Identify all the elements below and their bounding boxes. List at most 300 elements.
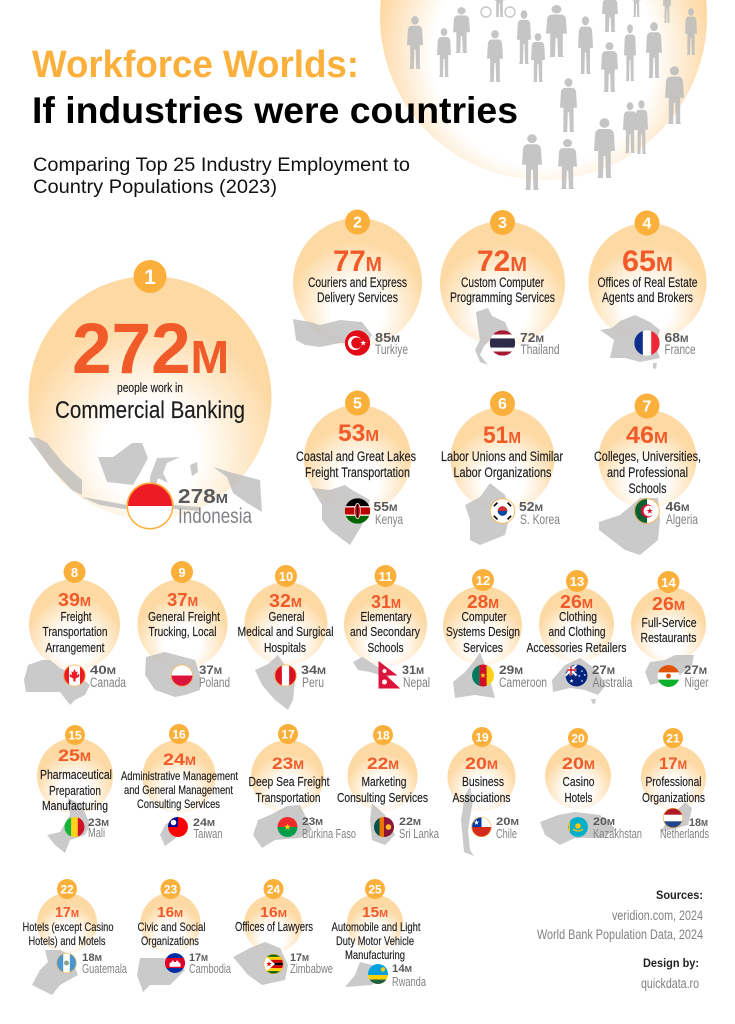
label: Schools xyxy=(368,640,404,655)
card 3: Custom Computer Programming / Thailand xyxy=(440,210,565,365)
bubble xyxy=(348,741,418,811)
flag: Burkina Faso xyxy=(278,817,298,837)
flag: Nepal xyxy=(379,662,399,688)
card 7: Colleges / Algeria xyxy=(594,394,701,555)
label: Professional xyxy=(646,774,702,789)
bubble xyxy=(138,579,228,669)
card 6: Labor Unions / S. Korea xyxy=(441,391,563,545)
rank badge: 16 xyxy=(172,728,186,742)
map: Niger xyxy=(645,655,694,685)
title: If industries were countries xyxy=(32,90,518,131)
title: Workforce Worlds: xyxy=(32,44,359,86)
card 21: Professional Organizations / Netherlands xyxy=(641,728,709,841)
card 13: Clothing Retailers / Australia xyxy=(526,570,633,704)
population xyxy=(499,663,547,690)
flag: S. Korea xyxy=(490,498,515,524)
value: 16M xyxy=(260,905,287,921)
label: Consulting Services xyxy=(337,790,428,805)
bubble xyxy=(293,218,422,347)
label: and General Management xyxy=(124,783,234,797)
bubble xyxy=(244,582,328,665)
population: Kazakhstan xyxy=(593,827,642,841)
card 24: Offices of Lawyers / Zimbabwe xyxy=(233,879,333,985)
label xyxy=(40,767,112,813)
card 4: Real Estate / France xyxy=(588,210,706,369)
population xyxy=(199,663,230,690)
bubble xyxy=(631,587,706,662)
flag: Thailand xyxy=(490,330,515,356)
label: Labor Organizations xyxy=(454,465,552,480)
population xyxy=(592,663,633,690)
value: 15M xyxy=(362,905,388,921)
rank badge: 18 xyxy=(376,728,390,742)
label: Administrative Management xyxy=(121,769,239,783)
label xyxy=(121,769,239,811)
value: 37M xyxy=(167,589,198,610)
flag: Cameroon xyxy=(472,664,494,686)
population: 24M xyxy=(193,817,215,829)
label: Coastal and Great Lakes xyxy=(296,449,416,464)
label: Offices of Real Estate xyxy=(598,275,698,290)
rank badge xyxy=(345,210,370,234)
map: Kazakhstan xyxy=(540,812,617,845)
population xyxy=(178,486,252,528)
rank badge: 3 xyxy=(498,215,507,232)
title xyxy=(32,44,518,131)
population xyxy=(374,499,403,527)
population xyxy=(402,663,430,690)
population: Nepal xyxy=(403,675,430,690)
label xyxy=(296,449,416,480)
label: Organizations xyxy=(642,790,705,805)
map: Peru xyxy=(255,655,295,710)
rank badge xyxy=(634,210,660,236)
flag: Poland xyxy=(171,664,193,686)
value: 22M xyxy=(367,754,399,773)
label: Commercial Banking xyxy=(55,397,245,424)
population: 72M xyxy=(520,330,544,345)
label: Custom Computer xyxy=(461,275,544,290)
label: people work in xyxy=(117,380,183,395)
rank badge: 22 xyxy=(60,882,74,896)
flag: Mali xyxy=(64,817,84,837)
label: Deep Sea Freight xyxy=(248,774,330,789)
rank badge: 10 xyxy=(279,569,293,584)
map: Cambodia xyxy=(137,958,185,992)
population: Zimbabwe xyxy=(290,962,333,976)
flag: Chile xyxy=(472,817,492,837)
population: Algeria xyxy=(666,511,698,527)
rank badge: 8 xyxy=(71,565,78,580)
rank badge: 4 xyxy=(643,216,652,232)
population: S. Korea xyxy=(520,511,560,527)
population xyxy=(189,952,231,976)
population: 34 M xyxy=(301,663,326,677)
label: and Clothing xyxy=(548,624,606,639)
population: 29M xyxy=(499,663,523,677)
rank badge: 24 xyxy=(267,882,280,896)
label: Organizations xyxy=(141,934,199,948)
population xyxy=(290,952,333,976)
population: France xyxy=(664,341,696,357)
bubble xyxy=(641,745,706,810)
bubble xyxy=(545,743,611,809)
sources: veridion.com, 2024 xyxy=(612,908,703,923)
label xyxy=(640,615,697,645)
population: 278 M xyxy=(178,486,228,508)
value: 20 M xyxy=(562,754,595,773)
bubble xyxy=(140,893,200,953)
rank badge: 11 xyxy=(379,569,392,584)
bubble xyxy=(539,587,614,662)
value: 26M xyxy=(652,593,685,614)
label: Business xyxy=(462,774,504,789)
population: 17M xyxy=(189,952,208,964)
label: Hospitals xyxy=(264,640,306,655)
value: 25 M xyxy=(58,746,91,765)
rank badge xyxy=(345,390,370,416)
rank badge: 14 xyxy=(661,575,676,590)
card 19: Business Associations / Chile xyxy=(448,727,519,856)
value: 46M xyxy=(626,422,668,449)
bubble xyxy=(29,579,120,670)
value: 77M xyxy=(333,245,382,278)
flag: Taiwan xyxy=(168,817,188,837)
value: 53M xyxy=(338,420,379,447)
population: Cameroon xyxy=(499,675,547,690)
label: Preparation xyxy=(49,783,101,798)
map: Nepal xyxy=(353,657,390,678)
label: Freight xyxy=(60,609,92,624)
value: 72M xyxy=(477,245,527,278)
card 14: Full-Service Restaurants / Niger xyxy=(631,571,709,690)
map: Zimbabwe xyxy=(233,942,288,985)
map: Netherlands xyxy=(660,802,692,832)
subtitle: Country Populations (2023) xyxy=(33,177,277,198)
label: Labor Unions and Similar xyxy=(441,449,563,464)
label: Clothing xyxy=(559,609,597,624)
label xyxy=(55,380,245,424)
label: General Freight xyxy=(148,609,220,624)
population: Peru xyxy=(302,675,324,690)
label xyxy=(350,609,420,655)
rank badge: 19 xyxy=(475,730,489,744)
label xyxy=(594,449,701,496)
card 10: Hospitals / Peru xyxy=(238,565,334,710)
card 1: Commercial Banking / Indonesia xyxy=(28,260,272,530)
bubble xyxy=(588,223,706,341)
flag: Sri Lanka xyxy=(374,817,394,837)
label xyxy=(238,609,334,655)
population: Sri Lanka xyxy=(399,827,439,841)
flag: Netherlands xyxy=(663,808,683,828)
population: Cambodia xyxy=(189,962,231,976)
population xyxy=(593,816,642,841)
population xyxy=(88,817,109,840)
rank badge: 12 xyxy=(476,573,490,588)
population: 27M xyxy=(684,663,707,677)
label xyxy=(337,774,428,805)
population: 37M xyxy=(199,663,222,677)
map: Chile xyxy=(461,787,474,856)
label: Programming Services xyxy=(450,290,555,305)
map: Poland xyxy=(145,652,200,697)
rank badge xyxy=(134,260,166,293)
flag: Australia xyxy=(566,664,588,686)
value: 31M xyxy=(371,591,401,612)
population: Mali xyxy=(88,826,105,840)
population: Guatemala xyxy=(82,962,127,976)
bubble xyxy=(37,738,113,814)
population: 20 M xyxy=(496,816,519,828)
population: 20M xyxy=(593,816,615,828)
population: 52M xyxy=(519,499,543,514)
population: Burkina Faso xyxy=(302,827,356,841)
population: Chile xyxy=(496,827,517,841)
label: Duty Motor Vehicle xyxy=(336,934,414,948)
label: General xyxy=(268,609,305,624)
label: Hotels) and Motels xyxy=(28,934,106,948)
population: 40 M xyxy=(90,663,116,677)
map: Guatemala xyxy=(32,950,78,995)
population xyxy=(392,963,426,989)
population: 23M xyxy=(302,816,323,828)
map: Turkiye xyxy=(293,319,372,347)
label: Medical and Surgical xyxy=(238,624,334,639)
sources: Sources: xyxy=(656,888,703,902)
population: 68M xyxy=(664,330,689,345)
value: 17M xyxy=(55,905,79,921)
flag: Kazakhstan xyxy=(568,817,588,837)
label: and Professional xyxy=(607,465,688,480)
flag: Kenya xyxy=(345,498,370,524)
label: Agents and Brokers xyxy=(602,290,693,305)
population: Turkiye xyxy=(375,341,408,357)
label: Accessories Retailers xyxy=(526,640,627,655)
flag: Guatemala xyxy=(56,953,76,973)
label xyxy=(22,920,114,948)
subtitle: Comparing Top 25 Industry Employment to xyxy=(33,155,410,176)
value: 51M xyxy=(483,422,521,449)
rank badge xyxy=(64,561,86,583)
value: 65M xyxy=(622,245,673,278)
label xyxy=(42,609,108,655)
flag: Zimbabwe xyxy=(264,954,284,974)
flag: Niger xyxy=(658,665,680,687)
map: Algeria xyxy=(599,498,660,555)
label: Transportation xyxy=(256,790,320,805)
card 5: Coastal Freight / Kenya xyxy=(296,390,416,545)
rank badge: 13 xyxy=(570,574,584,589)
map: Cameroon xyxy=(453,652,495,698)
label: Elementary xyxy=(360,609,412,624)
map: Taiwan xyxy=(160,820,180,846)
population xyxy=(82,952,127,976)
bubble xyxy=(142,740,216,813)
population xyxy=(666,499,698,527)
population: 17M xyxy=(290,952,309,964)
card 15: Pharmaceutical / Mali xyxy=(37,725,113,853)
bubble xyxy=(450,407,554,511)
map: Mali xyxy=(47,798,90,853)
population xyxy=(90,663,126,690)
card 20: Casino Hotels / Kazakhstan xyxy=(540,728,642,845)
rank badge: 1 xyxy=(144,266,156,289)
label: Marketing xyxy=(362,774,406,789)
rank badge: 21 xyxy=(666,732,680,746)
label: Manufacturing xyxy=(345,948,405,962)
rank badge: 20 xyxy=(571,732,585,746)
label: Trucking, Local xyxy=(148,624,217,639)
design credit: quickdata.ro xyxy=(641,976,699,991)
flag: Canada xyxy=(64,664,86,686)
population xyxy=(375,330,408,357)
value: 272M xyxy=(72,310,229,389)
population: Taiwan xyxy=(194,827,223,841)
map: Burkina Faso xyxy=(253,805,312,848)
bubble xyxy=(251,740,324,813)
value: 24 M xyxy=(163,750,196,769)
population: 31M xyxy=(402,663,424,677)
flag: Turkiye xyxy=(345,330,370,356)
card 8: Freight Arrangement / Canada xyxy=(24,561,126,705)
label: and Secondary xyxy=(350,624,420,639)
card 2: Couriers / Turkiye xyxy=(293,210,422,357)
label xyxy=(148,609,220,639)
label: Civic and Social xyxy=(138,920,206,934)
flag: Algeria xyxy=(634,498,660,524)
label xyxy=(248,774,330,805)
card 25: Automobile Manufacturing / Rwanda xyxy=(332,879,426,989)
label: Full-Service xyxy=(642,615,696,630)
label xyxy=(452,774,511,805)
label: Freight Transportation xyxy=(305,465,410,480)
population xyxy=(664,330,696,357)
value: 23M xyxy=(272,754,304,773)
label xyxy=(526,609,627,655)
population: 55M xyxy=(374,499,398,514)
bubble xyxy=(244,895,302,953)
rank badge xyxy=(490,391,515,416)
population xyxy=(193,817,223,841)
flag: Peru xyxy=(274,664,296,686)
population xyxy=(660,817,709,841)
population: 18M xyxy=(689,817,708,829)
population: Indonesia xyxy=(178,505,252,528)
population: Netherlands xyxy=(660,827,709,841)
population xyxy=(684,663,709,690)
flag: France xyxy=(634,330,660,356)
label: Pharmaceutical xyxy=(40,767,112,782)
rank badge: 9 xyxy=(178,565,186,580)
population: Kenya xyxy=(375,511,403,527)
label xyxy=(308,275,407,305)
label: Systems Design xyxy=(446,624,520,639)
rank badge: 7 xyxy=(643,398,652,416)
population xyxy=(496,816,519,841)
value: 20 M xyxy=(465,754,498,773)
label: Schools xyxy=(628,481,667,496)
rank badge: 5 xyxy=(353,396,362,412)
map: Indonesia xyxy=(28,437,262,512)
rank badge: 2 xyxy=(353,214,362,232)
population: 85M xyxy=(375,330,400,345)
rank badge: 23 xyxy=(164,882,177,896)
population: 23M xyxy=(88,817,109,829)
bubble xyxy=(28,276,272,519)
population: Thailand xyxy=(520,341,560,357)
label xyxy=(446,609,520,655)
label: Manufacturing xyxy=(42,798,108,813)
bubble xyxy=(304,405,411,512)
map: Thailand xyxy=(475,308,512,365)
population: Australia xyxy=(592,675,633,690)
bubble xyxy=(347,895,403,951)
population: 46M xyxy=(666,499,690,514)
bubble xyxy=(598,410,696,508)
label xyxy=(441,449,563,480)
value: 28M xyxy=(467,591,499,612)
label: Delivery Services xyxy=(317,290,398,305)
value: 17M xyxy=(659,754,687,773)
label: Automobile and Light xyxy=(332,920,421,934)
label xyxy=(138,920,206,948)
rank badge xyxy=(275,565,297,587)
population xyxy=(399,816,439,841)
bubble xyxy=(344,583,427,666)
population: Niger xyxy=(684,675,709,690)
population: 14M xyxy=(392,963,412,975)
label: Transportation xyxy=(42,624,108,639)
design credit xyxy=(641,956,699,991)
label: Colleges, Universities, xyxy=(594,449,701,464)
value: 32M xyxy=(269,590,302,611)
bubble xyxy=(37,893,97,953)
rank badge: 6 xyxy=(498,396,507,413)
population xyxy=(302,816,356,841)
value: 39M xyxy=(58,589,91,610)
label: Services xyxy=(463,640,503,655)
label xyxy=(332,920,421,962)
label xyxy=(562,774,594,805)
label: Associations xyxy=(452,790,511,805)
map: France xyxy=(600,315,660,369)
label xyxy=(598,275,698,305)
header circle with silhouettes xyxy=(380,0,707,190)
card 17: Deep Sea Freight / Burkina Faso xyxy=(248,724,356,848)
population: 18M xyxy=(82,952,102,964)
label: Couriers and Express xyxy=(308,275,407,290)
label: Arrangement xyxy=(46,640,105,655)
value: 16M xyxy=(157,905,183,921)
population: Poland xyxy=(199,675,230,690)
value: 26M xyxy=(560,591,593,612)
card 12: Computer Systems Design / Cameroon xyxy=(443,569,547,698)
card 11: Schools / Nepal xyxy=(344,565,430,690)
card 9: General Freight Trucking / Poland xyxy=(138,561,230,697)
label xyxy=(642,774,705,805)
label: Consulting Services xyxy=(137,797,220,811)
map: Sri Lanka xyxy=(370,803,395,845)
map: Canada xyxy=(24,660,90,705)
label: Casino xyxy=(562,774,594,789)
bubble xyxy=(443,586,522,665)
label: Computer xyxy=(462,609,507,624)
label: Hotels (except Casino xyxy=(22,920,114,934)
population: Rwanda xyxy=(392,975,426,989)
population xyxy=(520,330,560,357)
flag: Indonesia xyxy=(126,482,174,530)
